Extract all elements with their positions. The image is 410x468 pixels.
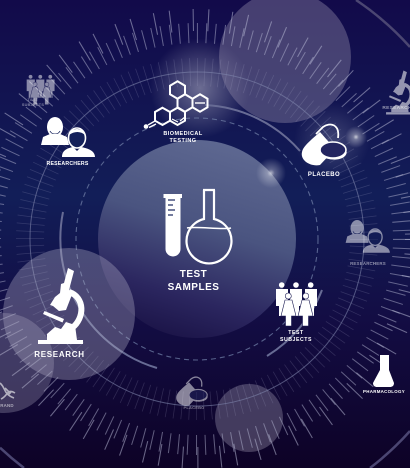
label: test subjects — [280, 330, 312, 343]
label: test subjects: TEST — [288, 330, 304, 336]
faded icon: researchers — [346, 220, 390, 253]
label: researchers: RESEARCHERS — [47, 161, 89, 167]
label: placebo: PLACEBO — [308, 172, 340, 178]
icon: test tube and flask — [164, 190, 232, 263]
faded icon: test subjects — [27, 75, 55, 105]
soft light glows — [150, 38, 370, 178]
icon: molecule — [144, 81, 208, 129]
label: biomedical testing: TESTING — [170, 138, 196, 144]
translucent circle: top right — [219, 0, 351, 123]
faded label: researchers: RESEARCHERS — [350, 261, 386, 266]
thick arc segments — [60, 105, 322, 368]
icon: placebo pills — [302, 125, 346, 165]
translucent circle: bottom — [215, 384, 283, 452]
faded label: test subjects: TEST — [28, 98, 39, 102]
icon: pharmacology flask — [373, 355, 394, 387]
icon: microscope — [38, 268, 83, 344]
dashed ring — [76, 118, 318, 360]
central disc — [98, 140, 296, 338]
label: research: RESEARCH — [34, 350, 85, 359]
faded label: strand: RAND — [0, 403, 14, 408]
label: test subjects: SUBJECTS — [280, 337, 312, 343]
faded label: test subjects — [22, 98, 44, 107]
faded icon: research — [386, 70, 410, 115]
faded label: placebo: PLACEBO — [184, 405, 204, 410]
icon: researchers — [41, 117, 95, 157]
label: pharmacology: PHARMACOLOGY — [363, 389, 405, 394]
light flares — [256, 126, 367, 188]
translucent circle: left small — [0, 313, 54, 413]
heading: test samples — [168, 269, 219, 293]
label: biomedical testing: BIOMEDICAL — [163, 131, 203, 137]
heading: test samples: SAMPLES — [168, 282, 219, 293]
faded icon: placebo — [176, 377, 207, 406]
thin outer ring — [30, 72, 364, 406]
heading: test samples: TEST — [180, 269, 207, 280]
faded icon: dna strand — [0, 383, 15, 399]
translucent circle: research — [3, 248, 135, 380]
label: biomedical testing — [163, 131, 203, 144]
faded label: test subjects: SUBJECTS — [22, 103, 44, 107]
icon: test subjects — [276, 282, 317, 326]
